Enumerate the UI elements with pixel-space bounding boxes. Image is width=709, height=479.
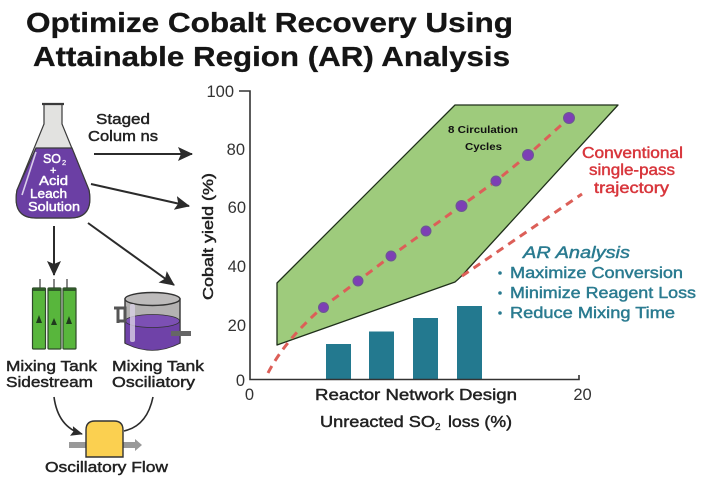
callout: AR analysis — [498, 243, 696, 322]
y axis tick labels: 0 — [236, 372, 245, 390]
trajectory: conventional single-pass dashed line — [462, 194, 582, 276]
label: mixing tank oscillatory: Osciliatory — [112, 374, 196, 391]
y axis tick labels — [206, 83, 246, 390]
label: mixing tank oscillatory — [112, 358, 205, 391]
y axis tick labels: 60 — [228, 199, 246, 217]
y axis tick labels: 80 — [227, 141, 245, 159]
arrow: flask to sidestream tank — [53, 226, 55, 275]
icon: oscillatory tank — [114, 292, 191, 350]
icon: flask with leach solution: SO — [43, 151, 61, 166]
x axis labels — [315, 387, 517, 433]
icon: sidestream columns — [32, 279, 76, 349]
bars: reactor network design — [326, 306, 482, 379]
x axis labels: loss (%) — [448, 414, 512, 431]
y axis title: Cobalt yield (%) — [201, 173, 217, 300]
data points — [318, 112, 574, 312]
x axis tick labels: 20 — [573, 386, 592, 404]
trajectory: AR dashed line — [268, 118, 569, 373]
label: staged columns: Staged — [96, 111, 150, 128]
label: conventional single-pass trajectory: trajectory — [594, 180, 669, 197]
attainable region polygon — [277, 105, 618, 345]
label: conventional single-pass trajectory: single-pass — [589, 162, 675, 179]
label: conventional single-pass trajectory: Conventional — [582, 145, 683, 162]
icon: flask with leach solution: 2 — [62, 158, 66, 167]
y axis tick labels: 20 — [228, 317, 246, 335]
title: Optimize Cobalt Recovery Using — [26, 7, 513, 38]
label: 8 circulation cycles — [448, 125, 518, 153]
axes — [239, 91, 579, 380]
title: Attainable Region (AR) Analysis — [33, 41, 510, 72]
y axis tick labels: 100 — [206, 83, 234, 101]
icon: oscillatory flow unit — [69, 421, 142, 457]
callout: AR analysis: AR Analysis — [522, 243, 631, 262]
icon: flask with leach solution: + — [50, 165, 56, 177]
icon: flask with leach solution — [16, 104, 90, 218]
x axis labels: 2 — [435, 422, 441, 433]
label: staged columns — [88, 111, 158, 145]
arrow: to staged columns path — [94, 153, 192, 155]
label: oscillatory flow: Oscillatory Flow — [45, 459, 168, 476]
icon: flask with leach solution: Leach — [30, 186, 67, 201]
label: 8 circulation cycles: 8 Circulation — [448, 125, 518, 136]
connector: oscillatory to flow unit — [124, 397, 153, 431]
x axis labels: Reactor Network Design — [315, 387, 517, 404]
label: mixing tank sidestream — [6, 358, 98, 391]
label: mixing tank oscillatory: Mixing Tank — [112, 358, 205, 375]
label: conventional single-pass trajectory — [582, 145, 683, 197]
arrow: flask to chart — [91, 184, 189, 206]
arrow: sidestream to flow unit — [54, 397, 82, 434]
callout: AR analysis: Maximize Conversion — [510, 265, 683, 282]
callout: AR analysis: Reduce Mixing Time — [510, 305, 675, 322]
x axis tick labels — [245, 386, 592, 404]
x axis labels: Unreacted SO — [320, 414, 435, 431]
chart: attainable region — [201, 83, 618, 433]
label: mixing tank sidestream: Sidestream — [6, 374, 93, 391]
label: 8 circulation cycles: Cycles — [465, 142, 502, 153]
callout: AR analysis: Minimize Reagent Loss — [510, 285, 696, 302]
y axis tick labels: 40 — [228, 258, 246, 276]
icon: flask with leach solution: Solution — [28, 199, 80, 214]
label: mixing tank sidestream: Mixing Tank — [6, 358, 98, 375]
label: staged columns: Colum ns — [88, 128, 158, 145]
icon: flask with leach solution: Acid — [39, 173, 68, 188]
title — [26, 7, 513, 72]
arrow: flask to oscillatory tank — [88, 223, 174, 285]
x axis tick labels: 0 — [245, 386, 254, 404]
